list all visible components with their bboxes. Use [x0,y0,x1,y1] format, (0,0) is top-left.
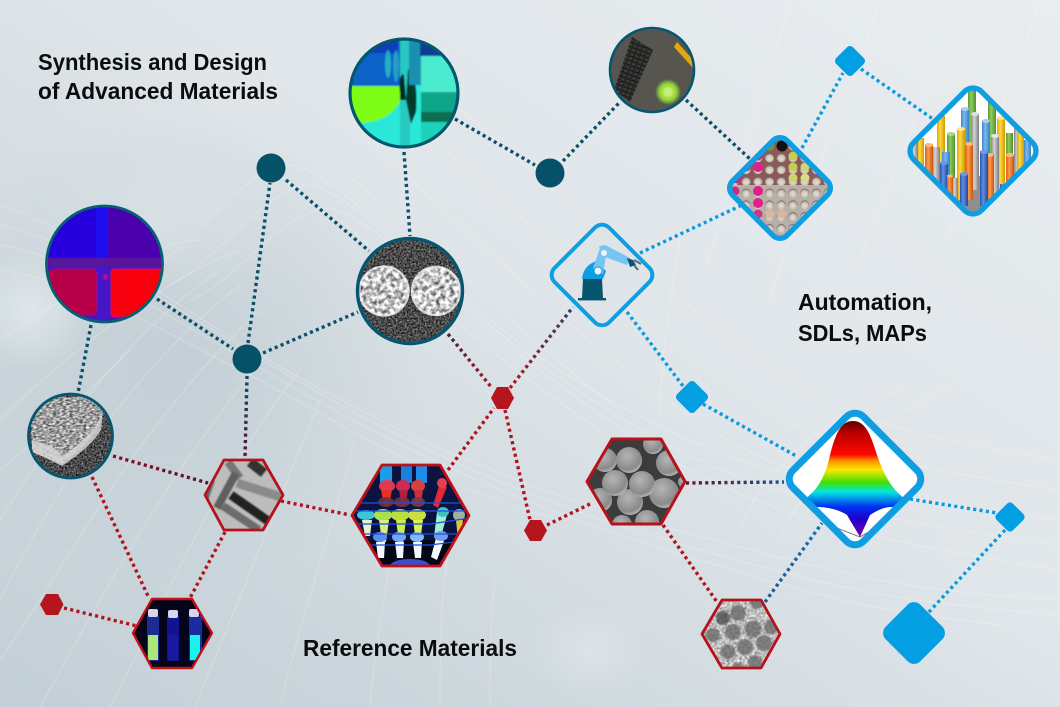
node: 3D bar chart diamond [907,85,1039,217]
node: solid teal dot (top centre) [536,158,564,188]
node: fluorescent cuvettes hexagon [132,598,214,670]
node: small red hexagon (centre junction) [491,387,514,409]
heading: synthesis and design [38,49,278,104]
node: solid teal dot (upper left) [256,154,286,182]
cuvette: green [147,609,159,661]
node: colloidal spheres hexagon [586,438,686,526]
node: well plate diamond [725,134,835,242]
heading: automation, SDLs, MAPs: SDLs, MAPs [798,320,927,346]
node: heat map circle [45,204,164,324]
node: carbon nanotube circle [608,26,698,116]
node: gaussian surface diamond [784,408,926,550]
node: reactor flask circle [345,35,463,153]
node: small red hexagon (far left) [40,594,64,615]
connectors: automation (blue) [627,69,1005,613]
node: small red hexagon (lower centre) [524,520,547,541]
heading: reference materials: Reference Materials [303,635,517,661]
cuvette: cyan [189,609,202,661]
node: textured film micrograph circle [28,393,114,479]
heading: synthesis and design: Synthesis and Design [38,49,267,75]
icon: robot arm [578,245,641,300]
node: double sphere micrograph circle [356,237,464,345]
node: nanoparticle lattice hexagon [700,598,782,670]
cuvette: blue [167,610,179,661]
heading: automation, SDLs, MAPs [798,289,932,346]
connector network [64,69,1005,626]
connectors: synthesis (dark teal) [78,100,750,393]
heading: synthesis and design: of Advanced Materials [38,78,278,104]
node: small blue diamond (centre) [674,379,710,415]
node: fluorescent tubes hexagon [350,464,470,573]
node: solid teal dot (left junction) [232,344,262,374]
node: small blue diamond (right) [994,501,1026,533]
connectors: reference materials (red) [64,307,822,626]
node: nanorod micrograph hexagon [204,459,284,531]
node: robot arm diamond [548,221,656,329]
node: small blue diamond (top) [833,44,867,78]
node: large blue diamond [879,598,949,668]
heading: automation, SDLs, MAPs: Automation, [798,289,932,315]
